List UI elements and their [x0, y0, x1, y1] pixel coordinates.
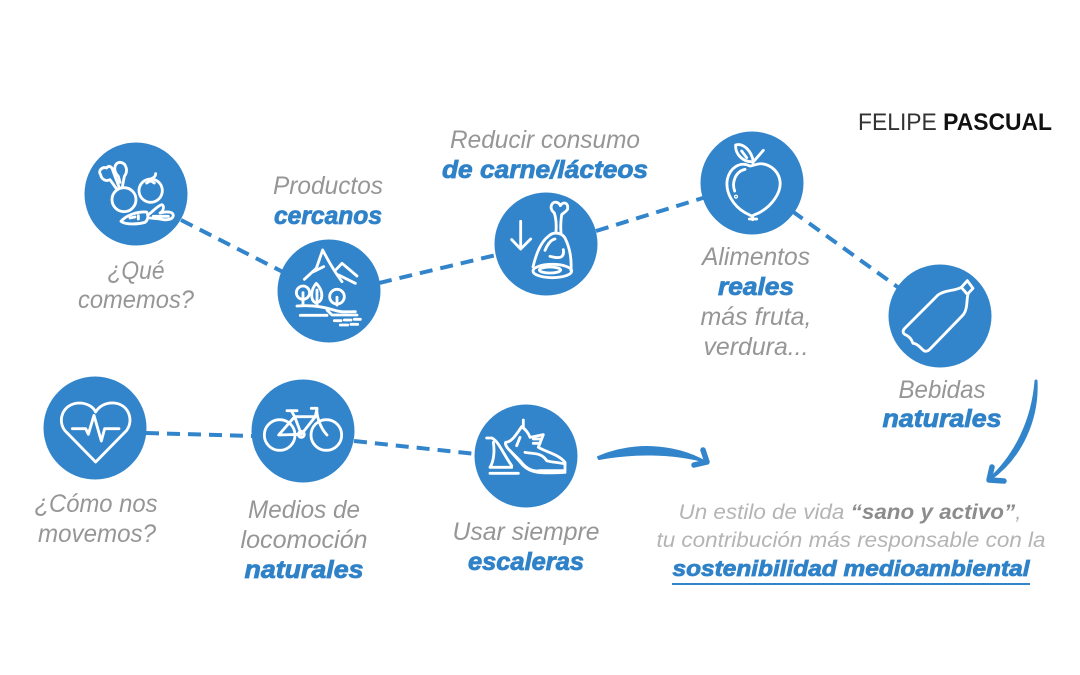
node: bicycle [252, 380, 354, 482]
label: ¿Cómo nos movemos?: movemos? [38, 520, 156, 548]
label: Medios de locomoción naturales [240, 496, 368, 584]
dashed path: movement row [146, 433, 476, 454]
conclusion text: tu contribución más responsable con la [656, 528, 1046, 552]
label: Medios de locomoción naturales: locomoción [240, 526, 368, 554]
label: Reducir consumo de carne/lácteos: de carne/lácteos [442, 156, 648, 184]
node: heart with pulse [44, 376, 146, 480]
node: ham with down arrow [494, 192, 598, 296]
label: Bebidas naturales: Bebidas [898, 376, 986, 404]
node: mountains and trees [278, 240, 380, 342]
label: Bebidas naturales [882, 376, 1002, 433]
label: Reducir consumo de carne/lácteos: Reducir consumo [450, 126, 640, 154]
conclusion text: Un estilo de vida “sano y activo” , [678, 500, 1021, 524]
label: Reducir consumo de carne/lácteos [442, 126, 648, 184]
label: ¿Cómo nos movemos?: ¿Cómo nos [34, 490, 158, 518]
label: ¿Qué comemos? [78, 257, 194, 314]
node: vegetables [84, 142, 188, 246]
label: ¿Qué comemos?: comemos? [78, 286, 194, 314]
dashed path: food row [181, 197, 899, 288]
node: apple [700, 132, 804, 234]
label: Alimentos reales: más fruta, [700, 303, 812, 331]
node: shoe on stairs [474, 404, 578, 508]
label: Productos cercanos: Productos [273, 172, 383, 200]
label: Usar siempre escaleras: Usar siempre [452, 518, 600, 546]
label: Medios de locomoción naturales: Medios de [248, 496, 360, 524]
label: Alimentos reales: Alimentos [700, 243, 810, 271]
label: ¿Qué comemos?: ¿Qué [108, 257, 164, 285]
label: Productos cercanos: cercanos [274, 202, 382, 230]
label: ¿Cómo nos movemos? [34, 490, 158, 548]
label: Usar siempre escaleras [452, 518, 600, 576]
brand: Felipe Pascual: FELIPE PASCUAL [858, 109, 1052, 136]
arrow: movement row to conclusion [598, 447, 707, 465]
label: Medios de locomoción naturales: naturales [244, 556, 364, 584]
label: Usar siempre escaleras: escaleras [468, 548, 584, 576]
label: Productos cercanos [273, 172, 383, 230]
label: Bebidas naturales: naturales [882, 405, 1002, 433]
conclusion text: sostenibilidad medioambiental [672, 556, 1030, 581]
arrow: drinks to conclusion [989, 381, 1036, 481]
node: water bottle [888, 264, 992, 368]
label: Alimentos reales: verdura... [704, 333, 808, 361]
label: Alimentos reales: reales [718, 273, 794, 301]
conclusion text [656, 500, 1046, 585]
label: Alimentos reales [700, 243, 812, 361]
